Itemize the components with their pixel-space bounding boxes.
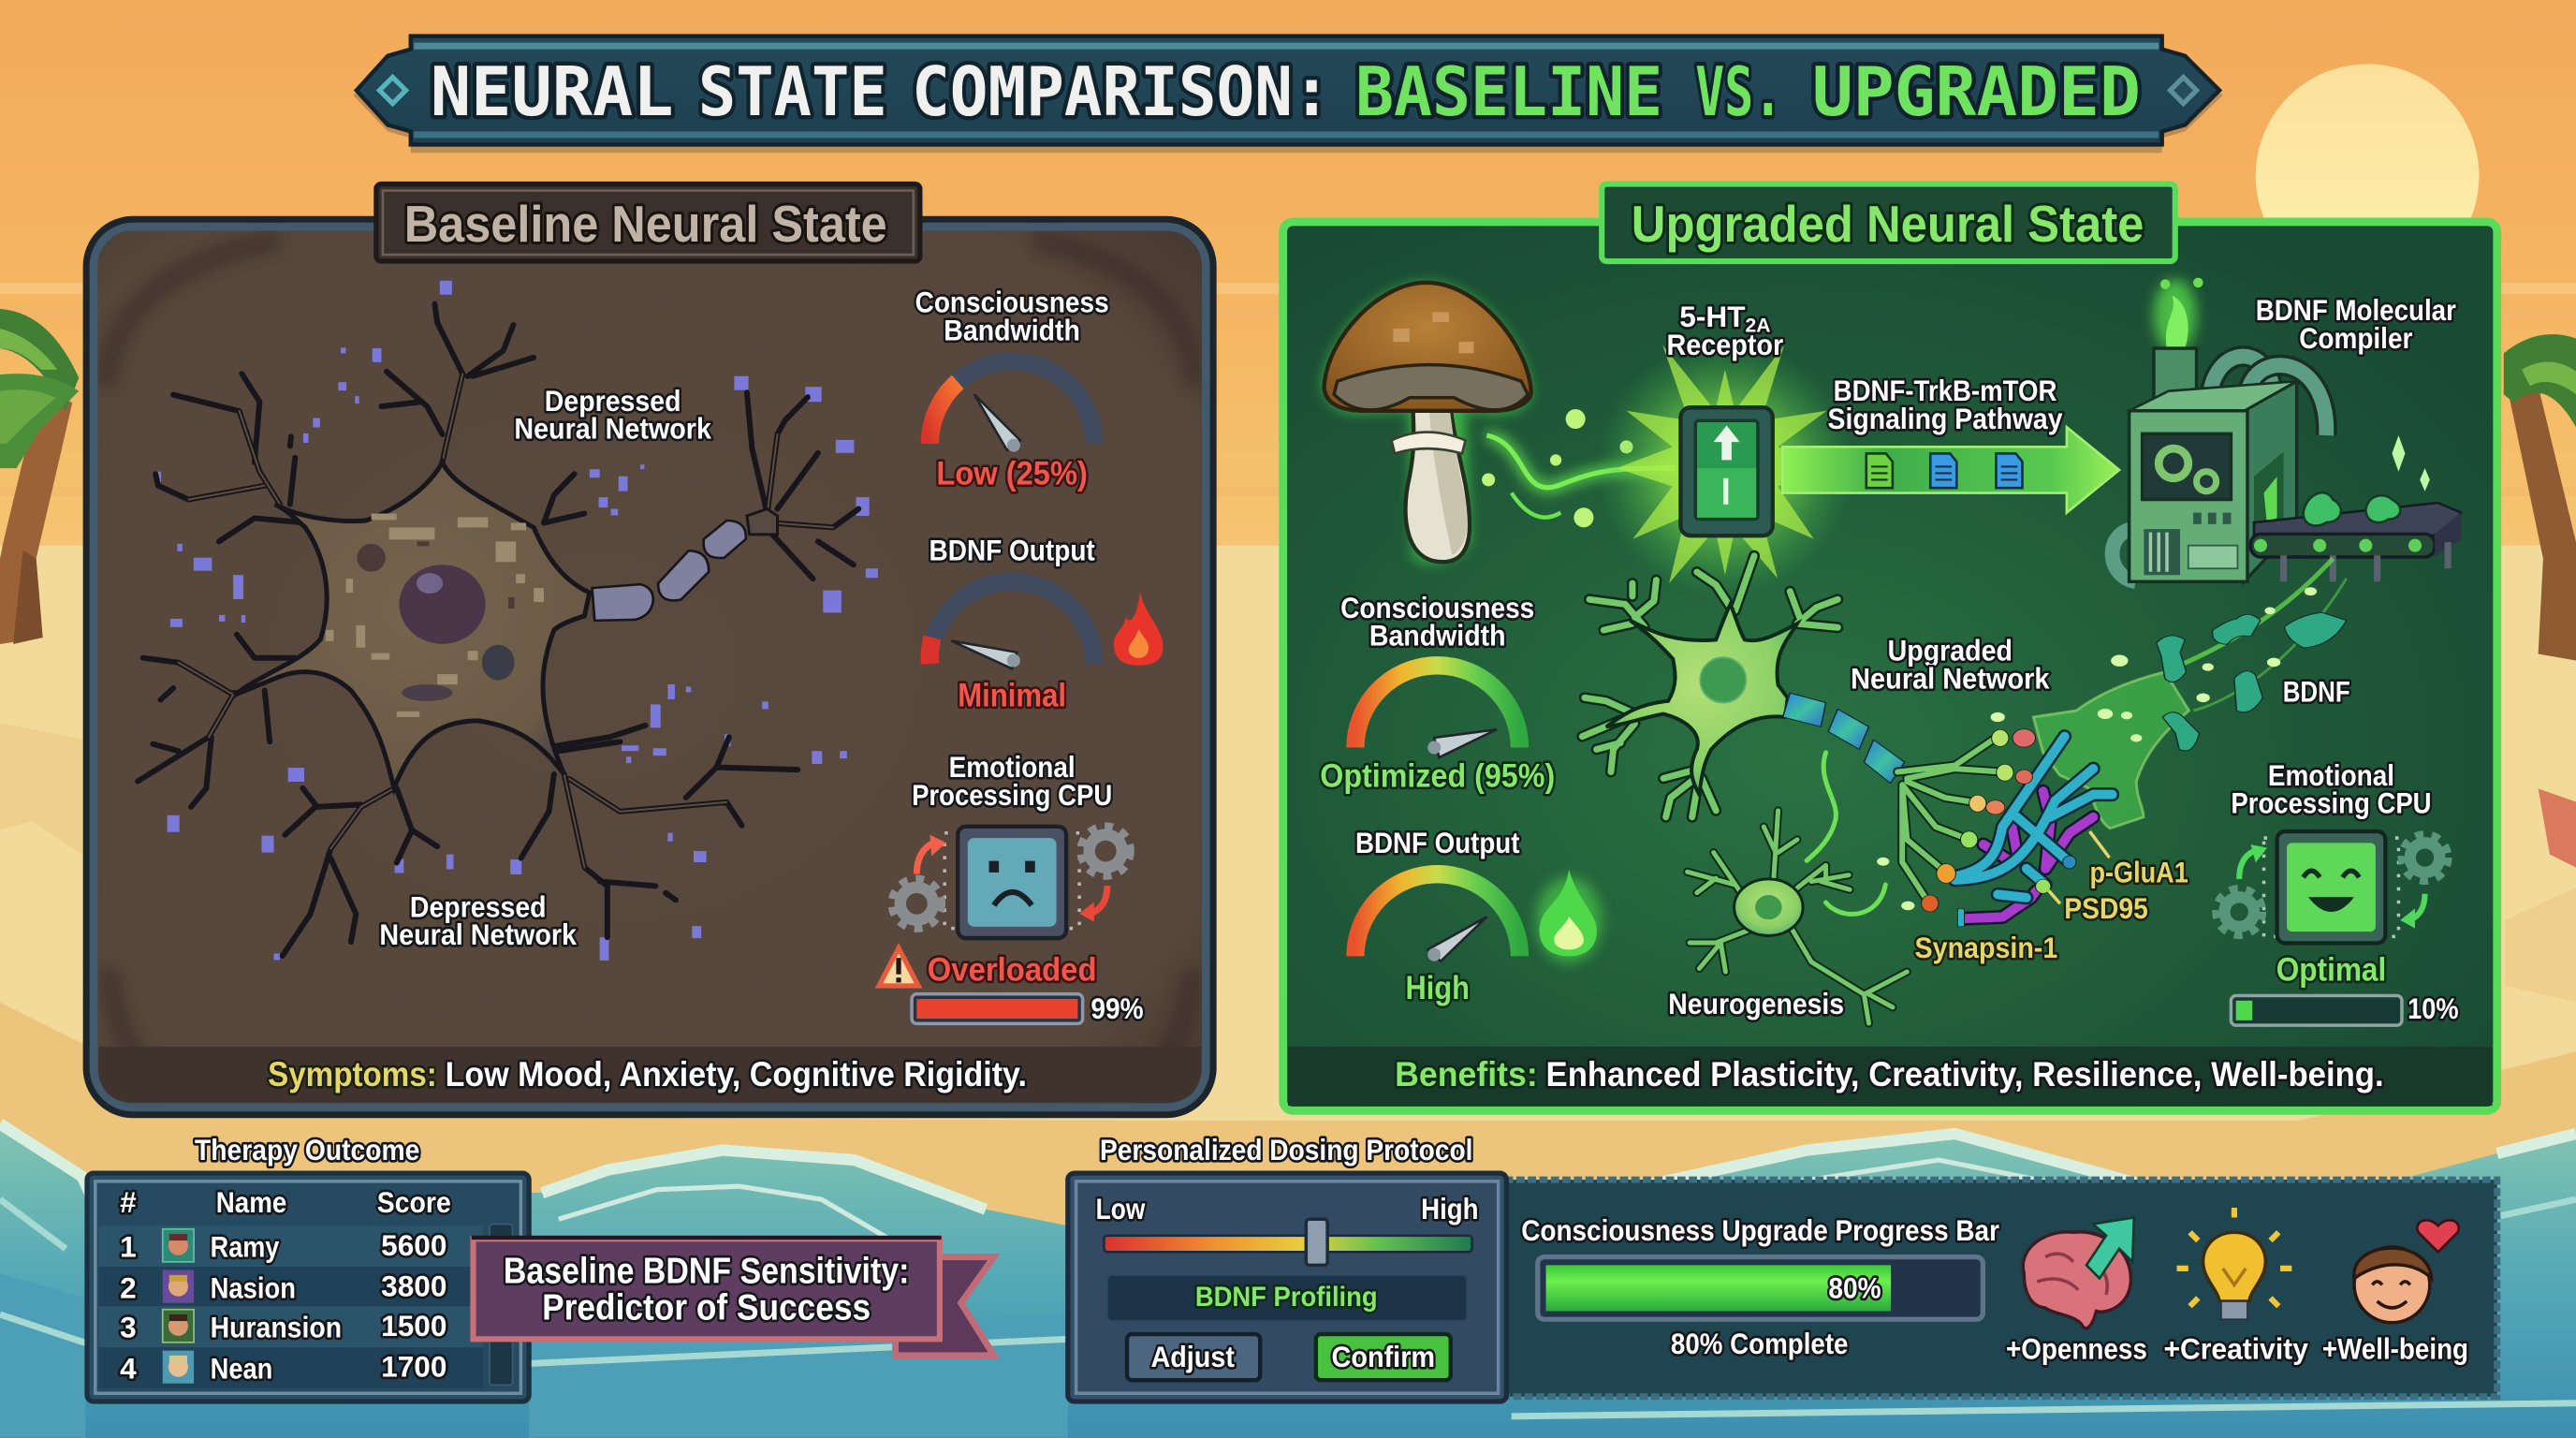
label: BDNF molecular compiler (2256, 293, 2456, 355)
panel frame (91, 224, 1209, 1110)
adjust button (1127, 1334, 1260, 1380)
row 3: 1500 (381, 1309, 446, 1343)
depressed neuron illustration (138, 281, 878, 961)
protein labels (1915, 831, 2188, 964)
status: overloaded: Overloaded (928, 952, 1097, 989)
panel heading tab (1602, 184, 2175, 261)
label: 5-HT2A receptor (1667, 300, 1783, 361)
icon: right palm tree (2504, 334, 2576, 661)
row 4: Nean (211, 1351, 272, 1385)
adjust button: Adjust (1150, 1340, 1235, 1373)
table rows (98, 1225, 483, 1388)
icon: warning triangle (879, 948, 918, 986)
icon: left palm tree (0, 309, 79, 644)
icon: brain openness: +Openness (2006, 1331, 2147, 1365)
label: neurogenesis: Neurogenesis (1668, 987, 1844, 1020)
row 3 (120, 1309, 446, 1344)
icon: mushroom (1323, 283, 1531, 563)
title text: green part: VS. (1695, 52, 1782, 131)
label: upgraded neural network: Neural Network (1851, 661, 2050, 695)
gauge: consciousness bandwidth optimized: Consciousness (1340, 591, 1534, 624)
table header (120, 1185, 451, 1219)
benefits strip (1288, 1047, 2492, 1106)
heading: therapy outcome: Therapy Outcome (195, 1133, 419, 1167)
icon: BDNF molecular compiler machine (2113, 278, 2461, 581)
label: signaling pathway (1828, 374, 2063, 435)
slider labels: Low (1096, 1192, 1146, 1225)
icon: overloaded CPU (892, 750, 1131, 938)
label: depressed neural network lower: Depressed (410, 889, 547, 923)
panel heading tab: Baseline Neural State (404, 196, 887, 253)
dose slider (1104, 1219, 1472, 1265)
gauge: consciousness bandwidth low (915, 285, 1109, 492)
green energy stream (1482, 409, 1676, 527)
label: upgraded neural network (1851, 634, 2050, 695)
BDNF molecules on belt (2304, 492, 2400, 526)
row 1: Ramy (211, 1230, 280, 1264)
small neuron nucleus (1755, 895, 1782, 919)
icon: red flame (1114, 592, 1164, 666)
symptoms text: Low Mood, Anxiety, Cognitive Rigidity. (446, 1055, 1027, 1093)
soma dark spots (357, 541, 515, 701)
gauge: consciousness bandwidth low: Consciousness (915, 285, 1109, 318)
BDNF swoosh trail (2034, 559, 2347, 829)
title text: white part: STATE (698, 52, 887, 131)
row 1: 1 (120, 1230, 137, 1264)
symptoms text: Symptoms: (268, 1055, 437, 1093)
table header: # (120, 1185, 137, 1219)
title text: white part (431, 52, 1331, 131)
gauge: consciousness bandwidth low: Low (25%) (936, 456, 1088, 492)
gauge: BDNF output high: BDNF Output (1355, 826, 1520, 859)
row 4: 1700 (381, 1350, 446, 1384)
synaptic green branches outline (1897, 737, 2002, 902)
icon: document blue (1930, 453, 1956, 488)
label: depressed neural network upper: Depressed (545, 384, 681, 418)
panel: personalized dosing controls (1068, 1173, 1506, 1401)
dendrites (138, 304, 858, 956)
label: BDNF: BDNF (2283, 674, 2350, 708)
icon: optimal CPU: Emotional (2268, 758, 2394, 792)
label: depressed neural network lower: Neural Network (379, 917, 577, 951)
icon: optimal CPU: Processing CPU (2231, 786, 2432, 820)
title text: green part (1355, 52, 2141, 131)
gauge: BDNF output high: High (1405, 970, 1470, 1006)
heading: personalized dosing protocol: Personalized Dosing Protocol (1100, 1133, 1472, 1167)
slider labels (1096, 1192, 1479, 1225)
teal tubes (1954, 737, 2113, 898)
row 1: 5600 (381, 1228, 446, 1262)
gauge: BDNF output minimal: Minimal (958, 678, 1066, 714)
synaptic green branches (1897, 737, 2002, 902)
icon: overloaded CPU: Processing CPU (912, 778, 1112, 812)
sparkles (2392, 435, 2430, 492)
purple tubes (1965, 791, 2093, 918)
gauge: consciousness bandwidth low: Bandwidth (944, 313, 1080, 346)
icon: 5-HT2A receptor burst (1597, 340, 1853, 596)
title banner (353, 37, 2223, 153)
benefits text: Enhanced Plasticity, Creativity, Resilience, Well-being. (1546, 1055, 2384, 1093)
label: 5-HT2A receptor: 2A (1745, 315, 1770, 337)
panel: upgraded neural state (1283, 184, 2497, 1110)
BDNF molecules (2157, 612, 2347, 751)
panel frame (1283, 222, 2497, 1110)
row 4: 4 (120, 1351, 137, 1385)
load bar 99%: 99% (1090, 991, 1144, 1025)
icon: document blue (1996, 453, 2023, 488)
soma speckle (326, 514, 544, 717)
myelin axon segments (593, 521, 746, 621)
load bar 10% (2231, 991, 2459, 1025)
conveyor belt (2250, 503, 2461, 581)
row 1 (120, 1228, 446, 1264)
axon myelin segments (1783, 693, 1905, 784)
symptoms strip (98, 1047, 1201, 1103)
protein labels: p-GluA1 (2089, 855, 2188, 888)
icon: happy face well-being: +Well-being (2322, 1331, 2468, 1365)
row 2 (120, 1269, 446, 1304)
protein labels: PSD95 (2064, 891, 2148, 925)
table header: Name (216, 1185, 286, 1219)
gauge: BDNF output minimal (929, 533, 1095, 714)
icon: light bulb creativity (2163, 1208, 2308, 1365)
label: BDNF molecular compiler: Compiler (2299, 321, 2412, 355)
panel: baseline neural state (91, 184, 1209, 1110)
BDNF profiling display (1107, 1275, 1467, 1321)
progress caption: 80% Complete (1671, 1327, 1848, 1360)
nucleus (1700, 657, 1746, 702)
gauge: BDNF output minimal: BDNF Output (929, 533, 1095, 566)
icon: document green (1866, 453, 1893, 488)
gauge: consciousness bandwidth optimized: Optimized (95%) (1320, 758, 1555, 795)
label: signaling pathway: Signaling Pathway (1828, 402, 2063, 435)
panel heading tab: Upgraded Neural State (1632, 196, 2144, 253)
glow dots (1877, 587, 2317, 910)
progress bar 80%: 80% (1828, 1270, 1881, 1304)
label: 5-HT2A receptor: Receptor (1667, 328, 1783, 361)
panel heading tab (376, 184, 920, 261)
label: signaling pathway: BDNF-TrkB-mTOR (1834, 374, 2057, 407)
panel: progress and rewards (1505, 1180, 2497, 1397)
arrow: signaling pathway (1782, 427, 2119, 513)
small neuron outline (1688, 811, 1907, 1023)
title text: green part: BASELINE (1355, 52, 1662, 131)
icon: optimal CPU (2217, 758, 2448, 943)
progress label: Consciousness Upgrade Progress Bar (1521, 1213, 1999, 1247)
panel: therapy outcome table (87, 1173, 529, 1401)
row 2: Nasion (211, 1270, 296, 1304)
slider labels: High (1421, 1192, 1479, 1225)
ribbon callout: Predictor of Success (542, 1287, 871, 1328)
row 3: 3 (120, 1311, 137, 1344)
gauge: BDNF output high (1355, 826, 1520, 1006)
title text: white part: NEURAL (431, 52, 674, 131)
row 2: 2 (120, 1270, 137, 1304)
green squiggles (1807, 753, 1885, 914)
confirm button (1316, 1334, 1451, 1380)
ribbon callout (472, 1236, 994, 1356)
synaptic nodes (1922, 729, 2076, 927)
small neuron green (1688, 811, 1907, 1023)
benefits text: Benefits: (1395, 1055, 1538, 1093)
panel corner shading (105, 240, 1196, 1084)
label: depressed neural network upper: Neural Network (514, 412, 711, 446)
label: upgraded neural network: Upgraded (1888, 634, 2012, 668)
main dendrites green (1582, 556, 1837, 817)
BDNF profiling display: BDNF Profiling (1195, 1282, 1378, 1313)
row 3: Huransion (211, 1311, 342, 1344)
soma (1606, 604, 1797, 795)
label: 5-HT2A receptor: 5-HT (1679, 300, 1745, 333)
title text: green part: UPGRADED (1812, 52, 2141, 131)
row 2: 3800 (381, 1269, 446, 1303)
icon: green flame (1536, 869, 1602, 962)
icon: happy face well-being (2322, 1220, 2468, 1365)
row 4 (120, 1350, 446, 1385)
gauge: consciousness bandwidth optimized: Bandwidth (1369, 619, 1506, 653)
icon: light bulb creativity: +Creativity (2163, 1331, 2308, 1365)
load bar 10%: 10% (2408, 991, 2459, 1025)
small neuron soma (1734, 879, 1803, 935)
panel inner border (94, 227, 1206, 1108)
load bar 99% (912, 991, 1144, 1025)
label: BDNF molecular compiler: BDNF Molecular (2256, 293, 2456, 327)
gauge: consciousness bandwidth optimized (1320, 591, 1555, 795)
label: depressed neural network upper (514, 384, 711, 446)
dendrite cores (179, 374, 833, 868)
blue speck particles (155, 281, 878, 961)
ribbon callout: Baseline BDNF Sensitivity: (504, 1252, 909, 1292)
status: optimal: Optimal (2276, 952, 2386, 989)
icon: overloaded CPU: Emotional (949, 750, 1076, 784)
progress bar 80% (1538, 1257, 1983, 1319)
table header: Score (377, 1185, 451, 1219)
scrollbar (490, 1224, 513, 1385)
title text: white part: COMPARISON: (912, 52, 1331, 131)
protein labels: Synapsin-1 (1915, 931, 2057, 964)
main dendrites outline (1582, 556, 1837, 817)
nucleus (399, 565, 486, 644)
axon terminal (747, 509, 777, 535)
confirm button: Confirm (1332, 1340, 1435, 1373)
soma body (234, 462, 590, 788)
label: depressed neural network lower (379, 889, 577, 951)
upgraded neuron illustration (1582, 556, 2347, 1023)
icon: brain openness (2006, 1217, 2147, 1365)
